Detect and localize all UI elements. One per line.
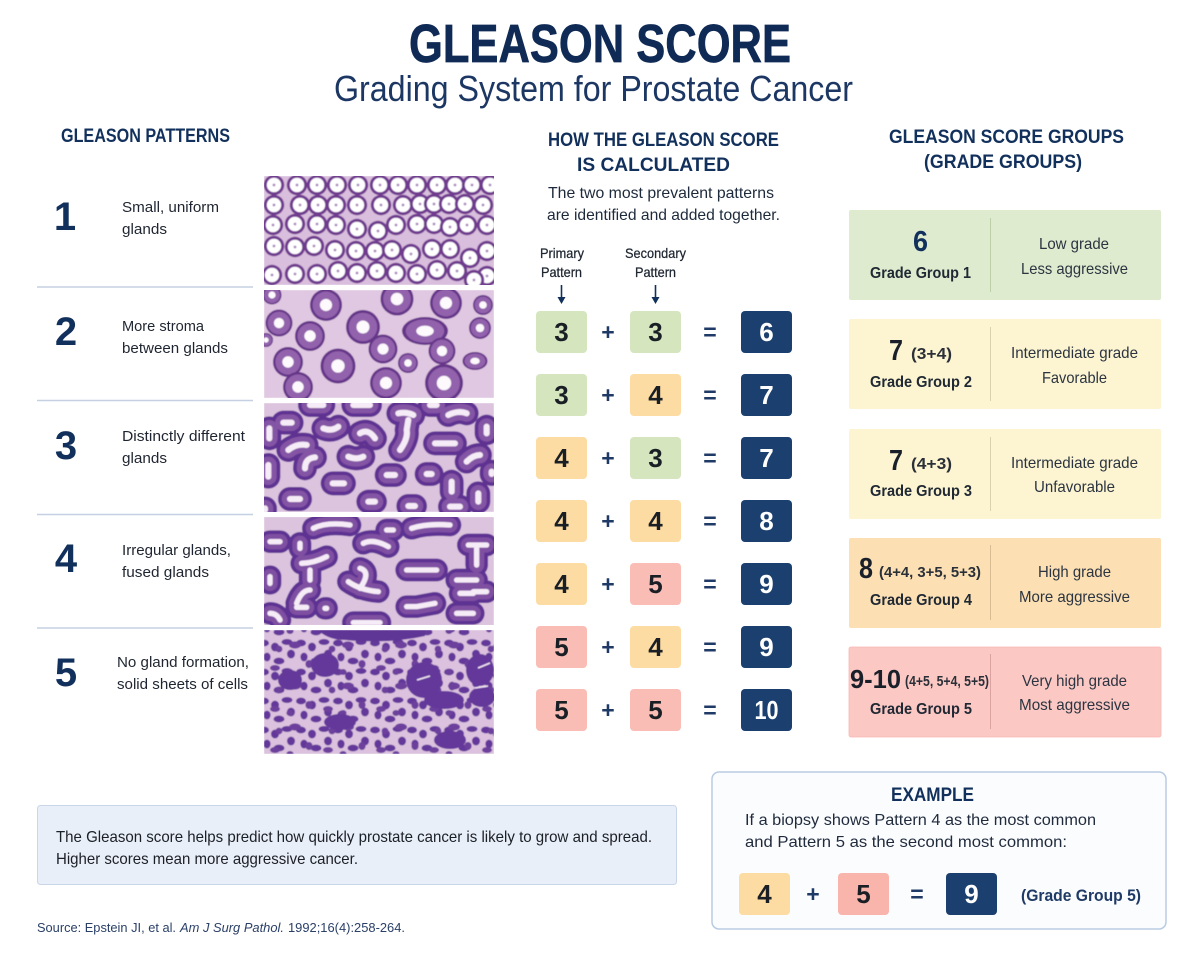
row 5+4=9: + (601, 634, 615, 660)
card: grade group 4: 8 (859, 553, 873, 585)
card: grade group 1: Grade Group 1 (870, 265, 971, 282)
pattern 5: No gland formation, (117, 654, 249, 671)
row 3+3=6: + (601, 319, 615, 345)
example text: and Pattern 5 as the second most common: (745, 834, 1067, 851)
example text: If a biopsy shows Pattern 4 as the most common (745, 812, 1096, 829)
card: grade group 4: (4+4, 3+5, 5+3) (879, 564, 981, 581)
row 4+3=7: + (601, 445, 615, 471)
pattern 1: glands (122, 221, 167, 238)
source: Source: Epstein JI, et al. (37, 920, 176, 935)
row 3+3=6: 3 (554, 317, 569, 347)
card: grade group 2: Grade Group 2 (870, 374, 972, 391)
primary pattern label (540, 245, 584, 280)
card: grade group 2: (3+4) (911, 346, 952, 363)
panel: grade groups (849, 127, 1161, 737)
card: grade group 2: Intermediate grade (1011, 345, 1138, 362)
row 4+3=7: 3 (648, 443, 663, 473)
row 5+4=9: 9 (759, 632, 774, 662)
card: grade group 3 (849, 429, 1161, 519)
card: grade group 4 (849, 538, 1161, 628)
arrow: primary (558, 285, 566, 304)
row 3+4=7: 4 (648, 380, 663, 410)
histology image 3 (264, 403, 494, 512)
row 3+3=6: 6 (759, 317, 774, 347)
histology image 2 (264, 290, 494, 398)
card: grade group 3: Intermediate grade (1011, 455, 1138, 472)
heading: calculation: HOW THE GLEASON SCORE (548, 130, 779, 151)
panel: gleason patterns (37, 126, 253, 695)
pattern 5 (55, 651, 249, 695)
heading: gleason patterns: GLEASON PATTERNS (61, 126, 230, 147)
card: grade group 4: Grade Group 4 (870, 592, 972, 609)
histology image 1 (262, 175, 500, 290)
row 4+3=7: = (703, 445, 717, 471)
histology image 5 (264, 630, 495, 754)
row 4+3=7 (536, 437, 792, 479)
card: grade group 5: Most aggressive (1019, 697, 1130, 714)
callout: summary: The Gleason score helps predict how quickly prostate cancer is likely to grow and spread. (56, 829, 652, 846)
example equation: + (806, 881, 820, 907)
intro text: are identified and added together. (547, 207, 780, 224)
row 3+4=7 (536, 374, 792, 416)
row 3+3=6: 3 (648, 317, 663, 347)
pattern 3: glands (122, 450, 167, 467)
row 5+5=10: 5 (648, 695, 663, 725)
intro text (547, 185, 780, 224)
secondary pattern label: Pattern (635, 264, 676, 280)
heading: calculation: IS CALCULATED (577, 155, 730, 176)
heading: example: EXAMPLE (891, 785, 974, 806)
row 4+3=7: 7 (759, 443, 774, 473)
source: 1992;16(4):258-264. (288, 920, 405, 935)
card: grade group 2 (849, 319, 1161, 409)
pattern 5: solid sheets of cells (117, 676, 248, 693)
card: grade group 3: (4+3) (911, 456, 952, 473)
pattern 4: fused glands (122, 564, 209, 581)
row 5+4=9: = (703, 634, 717, 660)
heading: grade groups: GLEASON SCORE GROUPS (889, 127, 1124, 148)
card: grade group 5: (4+5, 5+4, 5+5) (905, 673, 989, 690)
row 5+5=10: 10 (754, 695, 778, 725)
card: grade group 1: Low grade (1039, 236, 1109, 253)
pattern 1 (54, 195, 219, 239)
pattern 2: between glands (122, 340, 228, 357)
pattern 3 (55, 424, 246, 468)
pattern 4: Irregular glands, (122, 542, 231, 559)
row 4+5=9: 9 (759, 569, 774, 599)
card: grade group 3: 7 (889, 445, 903, 477)
title (334, 14, 853, 109)
example equation: (Grade Group 5) (1021, 886, 1141, 905)
card: grade group 1: 6 (913, 226, 928, 258)
pattern 3: Distinctly different (122, 428, 246, 445)
card: grade group 3: Grade Group 3 (870, 483, 972, 500)
row 3+3=6 (536, 311, 792, 353)
row 5+5=10: + (601, 697, 615, 723)
row 4+5=9: = (703, 571, 717, 597)
row 4+4=8 (536, 500, 792, 542)
callout: summary: Higher scores mean more aggressive cancer. (56, 851, 358, 868)
card: grade group 5 (849, 647, 1161, 737)
row 5+5=10: = (703, 697, 717, 723)
pattern 4 (55, 537, 231, 581)
row 3+4=7: 3 (554, 380, 569, 410)
card: grade group 4: High grade (1038, 564, 1111, 581)
row 4+4=8: + (601, 508, 615, 534)
callout: summary (38, 806, 676, 884)
row 3+3=6: = (703, 319, 717, 345)
panel: how the score is calculated (536, 130, 792, 731)
row 4+4=8: 8 (759, 506, 774, 536)
row 4+5=9: + (601, 571, 615, 597)
histology image 4 (264, 517, 494, 626)
example equation: = (910, 881, 924, 907)
row 3+4=7: + (601, 382, 615, 408)
pattern 1: Small, uniform (122, 199, 219, 216)
row 5+5=10: 5 (554, 695, 569, 725)
panel: example (712, 772, 1166, 929)
card: grade group 3: Unfavorable (1034, 479, 1115, 496)
heading: grade groups (889, 127, 1124, 173)
row 4+5=9 (536, 563, 792, 605)
row 4+4=8: 4 (648, 506, 663, 536)
card: grade group 1 (849, 210, 1161, 300)
secondary pattern label: Secondary (625, 245, 686, 261)
row 5+4=9: 5 (554, 632, 569, 662)
row 4+5=9: 5 (648, 569, 663, 599)
card: grade group 4: More aggressive (1019, 589, 1130, 606)
pattern 4: 4 (55, 537, 78, 581)
heading: grade groups: (GRADE GROUPS) (924, 152, 1082, 173)
card: grade group 1: Less aggressive (1021, 261, 1128, 278)
row 4+4=8: 4 (554, 506, 569, 536)
pattern 1: 1 (54, 195, 76, 239)
card: grade group 5: 9-10 (850, 664, 901, 694)
intro text: The two most prevalent patterns (548, 185, 774, 202)
row 4+5=9: 4 (554, 569, 569, 599)
pattern 3: 3 (55, 424, 77, 468)
row 4+4=8: = (703, 508, 717, 534)
pattern 2 (55, 310, 228, 357)
card: grade group 5: Grade Group 5 (870, 701, 972, 718)
row 3+4=7: = (703, 382, 717, 408)
primary pattern label: Pattern (541, 264, 582, 280)
pattern 2: 2 (55, 310, 77, 354)
heading: calculation (548, 130, 779, 176)
example equation (739, 873, 1141, 915)
primary pattern label: Primary (540, 245, 584, 261)
row 5+5=10 (536, 689, 792, 731)
source: Am J Surg Pathol. (179, 920, 284, 935)
row 5+4=9: 4 (648, 632, 663, 662)
row 4+3=7: 4 (554, 443, 569, 473)
pattern 5: 5 (55, 651, 77, 695)
card: grade group 2: Favorable (1042, 370, 1107, 387)
row 3+4=7: 7 (759, 380, 774, 410)
card: grade group 2: 7 (889, 335, 903, 367)
pattern 2: More stroma (122, 318, 205, 335)
example equation: 5 (856, 879, 871, 909)
example equation: 9 (964, 879, 979, 909)
card: grade group 5: Very high grade (1022, 673, 1127, 690)
source (37, 920, 405, 935)
arrow: secondary (652, 285, 660, 304)
example equation: 4 (757, 879, 772, 909)
example text (745, 812, 1096, 851)
subtitle: Grading System for Prostate Cancer (334, 68, 853, 109)
row 5+4=9 (536, 626, 792, 668)
title: GLEASON SCORE (409, 14, 791, 74)
secondary pattern label (625, 245, 686, 280)
